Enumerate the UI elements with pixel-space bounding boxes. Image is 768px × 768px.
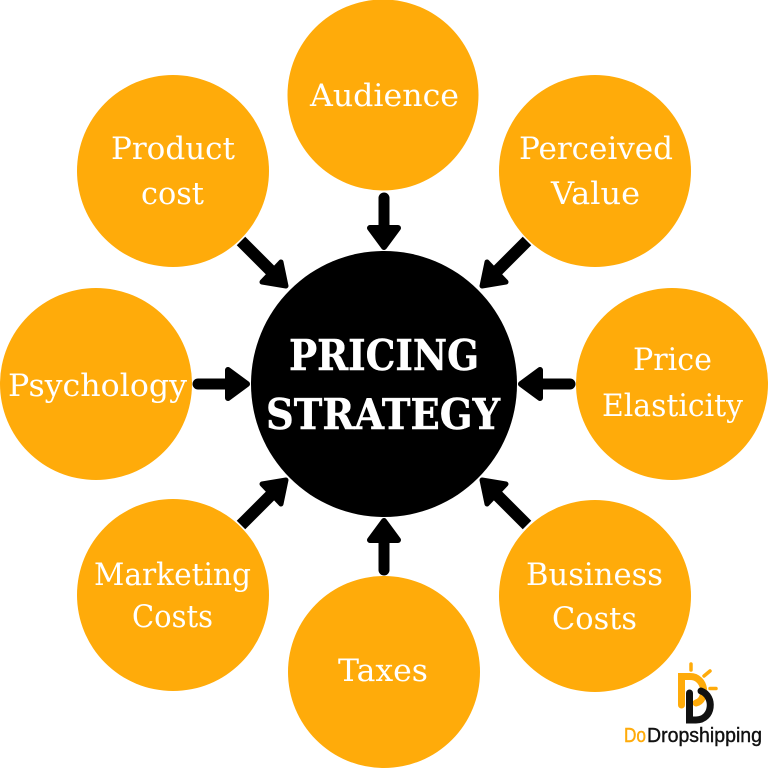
arrow: Audience to center <box>370 198 398 247</box>
node: Product cost <box>77 75 269 267</box>
node: Psychology: Psychology <box>8 368 187 404</box>
arrow: Perceived Value to center <box>482 241 527 286</box>
node: Psychology <box>0 288 192 480</box>
logo icon: sun rays and D letters <box>682 664 716 720</box>
node: Taxes <box>288 576 480 768</box>
node: Audience: Audience <box>309 78 459 114</box>
node: Taxes: Taxes <box>338 653 428 689</box>
node: Perceived Value <box>499 75 691 267</box>
logo wordmark: Do <box>624 725 646 747</box>
node: Business Costs: Costs <box>552 601 637 637</box>
node: Marketing Costs: Costs <box>132 599 213 635</box>
node: Business Costs <box>499 500 691 692</box>
center node: Pricing Strategy: PRICING <box>289 331 479 380</box>
arrow: Price Elasticity to center <box>521 370 570 398</box>
arrow: Business Costs to center <box>482 480 527 525</box>
arrow: Marketing Costs to center <box>241 480 286 525</box>
node: Product cost: cost <box>141 176 205 212</box>
node: Price Elasticity: Price <box>633 342 712 378</box>
center node: Pricing Strategy: STRATEGY <box>266 390 501 439</box>
node: Price Elasticity: Elasticity <box>602 388 743 424</box>
node: Business Costs: Business <box>526 557 663 593</box>
node: Audience <box>288 0 478 190</box>
arrow: Psychology to center <box>198 370 247 398</box>
logo wordmark: Dropshipping <box>647 725 762 747</box>
node: Perceived Value: Value <box>550 176 640 212</box>
arrow: Product cost to center <box>241 241 286 286</box>
arrow: Taxes to center <box>370 521 398 570</box>
node: Product cost: Product <box>111 131 236 167</box>
node: Price Elasticity <box>576 288 768 480</box>
logo: DoDropshipping <box>624 664 762 747</box>
center node: Pricing Strategy <box>251 251 517 517</box>
node: Marketing Costs <box>77 499 269 691</box>
node: Marketing Costs: Marketing <box>94 557 251 593</box>
node: Perceived Value: Perceived <box>519 131 673 167</box>
